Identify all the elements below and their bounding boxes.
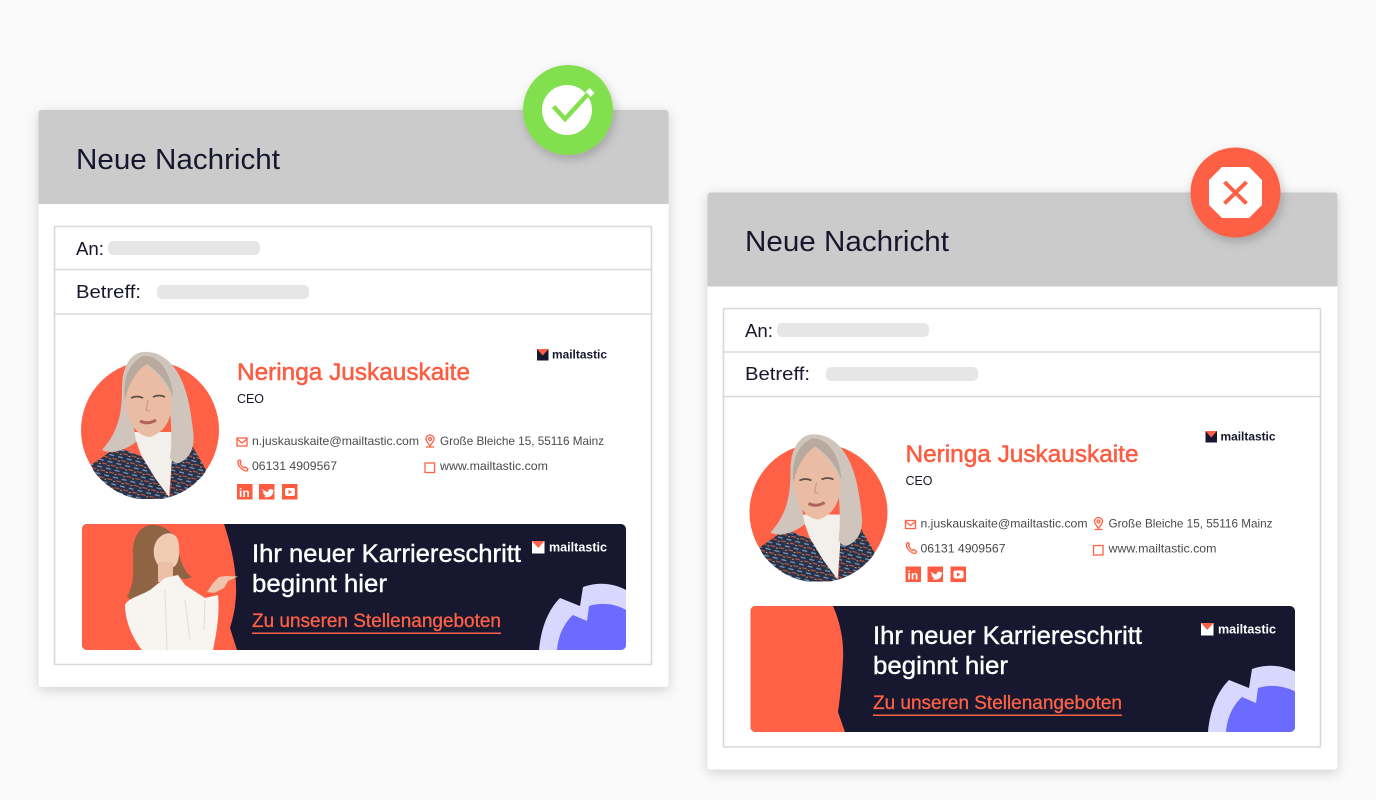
signature name and role: Neringa Juskauskaite [906,441,1138,468]
contact details: 06131 4909567 [920,542,1006,556]
social icons: in [239,486,250,500]
banner headline [873,622,1142,680]
signature name and role: CEO [906,473,932,488]
banner link: Zu unseren Stellenangeboten [873,693,1122,714]
contact details [252,434,604,473]
portrait photo [750,434,888,582]
banner headline: Ihr neuer Karriereschritt [252,540,521,568]
recipient field [76,239,260,259]
signature name and role: Neringa Juskauskaite [237,359,470,386]
card header: Neue Nachricht [745,226,949,258]
recipient field [745,321,929,341]
subject field [745,364,978,384]
mailtastic logo: mailtastic [1220,430,1276,444]
subject field: Betreff: [745,364,810,384]
banner [750,606,1296,732]
banner headline: beginnt hier [873,652,1008,680]
banner [82,524,626,650]
contact details: 06131 4909567 [252,459,337,473]
purple decoration [539,584,626,650]
signature name and role [237,359,470,406]
card background [708,192,1338,770]
contact details: Große Bleiche 15, 55116 Mainz [1108,516,1272,530]
card background [38,110,668,687]
contact icons [906,518,1103,555]
social icons [906,566,966,582]
contact details: www.mailtastic.com [1107,542,1216,556]
banner headline [252,540,521,598]
icon: green check badge [523,65,613,155]
social icons [237,484,298,500]
signature name and role [906,441,1138,488]
subject field: Betreff: [76,282,141,302]
contact details: www.mailtastic.com [439,459,548,473]
card header [38,110,668,204]
card header: Neue Nachricht [76,144,280,176]
contact details: Große Bleiche 15, 55116 Mainz [440,434,604,448]
signature name and role: CEO [237,391,264,406]
woman photo [125,525,238,650]
contact icons [237,435,434,472]
banner headline: Ihr neuer Karriereschritt [873,622,1142,650]
card header [708,192,1338,286]
panel: correct email (left card) [38,110,668,687]
mailtastic logo: mailtastic [552,348,607,362]
purple decoration [1208,666,1296,732]
recipient field: An: [745,321,773,341]
email form frame [724,308,1320,747]
icon: red stop badge [1190,148,1280,238]
contact details: n.juskauskaite@mailtastic.com [252,434,419,448]
email form frame [54,226,652,664]
panel: incorrect email (right card) [708,192,1338,770]
banner headline: beginnt hier [252,570,387,598]
portrait photo [81,352,219,499]
social icons: in [908,568,918,582]
banner link: Zu unseren Stellenangeboten [252,611,501,632]
contact details: n.juskauskaite@mailtastic.com [920,516,1088,530]
banner logo: mailtastic [549,540,607,554]
recipient field: An: [76,239,104,259]
subject field [76,282,309,302]
banner logo: mailtastic [1218,622,1276,636]
contact details [920,516,1272,556]
